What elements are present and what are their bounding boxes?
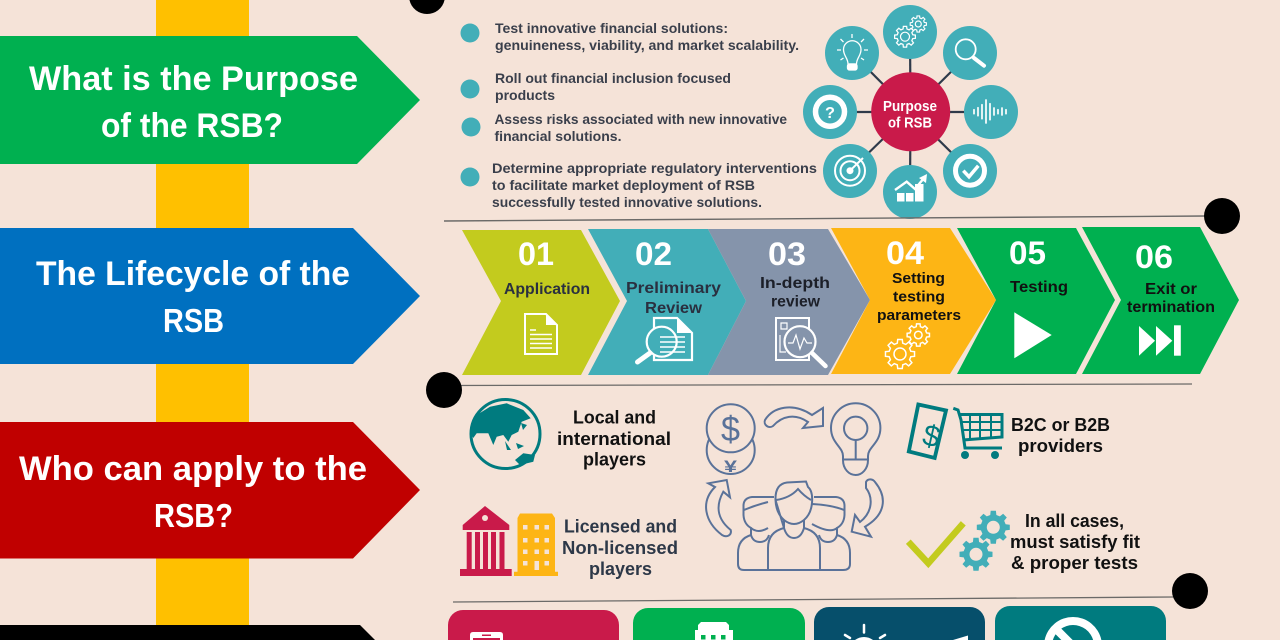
step 03 in-depth review: In-depth [760, 275, 830, 292]
heading arrow: lifecycle: The Lifecycle of the [36, 255, 350, 293]
people group [738, 482, 850, 570]
icon: phone with dollar: $ [919, 419, 943, 455]
step 06 exit or termination: termination [1127, 299, 1215, 316]
icon: check mark [908, 523, 963, 563]
step 02 preliminary review [588, 229, 746, 375]
node: divider with black dot [453, 573, 1208, 609]
heading arrow: purpose: of the RSB? [101, 107, 283, 145]
step 01 application: Application [504, 281, 590, 298]
step 04 setting testing parameters: testing [893, 288, 945, 306]
icon: magnifier [956, 39, 984, 66]
icon: phone with dollar [909, 404, 946, 458]
icon: innovation cycle [706, 403, 883, 570]
purpose bullet list: products [495, 87, 555, 103]
text: licensed and non-licensed players: Licensed and [564, 516, 677, 536]
node: divider with black dot [426, 372, 1192, 408]
heading arrow: black cut-off [0, 625, 375, 640]
step 06 exit or termination [1082, 227, 1239, 374]
text: local and international players: players [583, 450, 646, 470]
icon: question ring: ? [825, 105, 835, 122]
heading arrow: who can apply: Who can apply to the [19, 450, 367, 488]
applicants section [460, 400, 1140, 579]
yuan coin: ¥ [724, 457, 738, 476]
purpose bullet list: successfully tested innovative solutions. [492, 194, 762, 210]
bottom card: teal with prohibition icon [995, 606, 1166, 640]
icon: sound wave [974, 100, 1006, 123]
text: fit and proper tests [1010, 511, 1140, 573]
step 04 setting testing parameters: 04 [886, 235, 924, 271]
dollar coin: $ [721, 410, 740, 449]
text: licensed and non-licensed players: players [589, 559, 652, 579]
icon: shopping cart [953, 408, 1002, 459]
bulb [831, 403, 880, 475]
text: fit and proper tests: must satisfy fit [1010, 532, 1140, 552]
icon: gears [895, 16, 926, 47]
left person [738, 497, 774, 570]
step 04 setting testing parameters: Setting [892, 270, 945, 287]
icon: teal gears [960, 511, 1010, 571]
text: local and international players [557, 408, 671, 470]
step 05 testing [957, 228, 1115, 374]
purpose bullet list: Assess risks associated with new innovative [494, 111, 787, 127]
right person [812, 497, 850, 570]
node: top black dot [409, 0, 445, 14]
icon: globe [470, 400, 540, 468]
text: B2C or B2B providers: providers [1018, 436, 1103, 456]
step 02 preliminary review: 02 [635, 236, 672, 272]
text: licensed and non-licensed players: Non-licensed [562, 538, 678, 558]
icon: check ring [956, 156, 984, 185]
icon: rising chart [895, 174, 927, 202]
yuan coin [707, 426, 755, 476]
heading arrow: who can apply: RSB? [154, 497, 233, 534]
step 03 in-depth review: review [771, 294, 821, 310]
text: local and international players: Local and [573, 408, 656, 428]
text: licensed and non-licensed players [562, 516, 678, 579]
icon: light bulb [837, 34, 868, 70]
text: B2C or B2B providers: B2C or B2B [1011, 415, 1110, 435]
lifecycle chevrons [462, 227, 1239, 375]
step 05 testing: Testing [1010, 279, 1068, 296]
icon: bank [460, 506, 512, 576]
step 03 in-depth review [708, 229, 870, 375]
purpose bullet list: to facilitate market deployment of RSB [492, 177, 755, 193]
hub diagram: purpose of RSB [803, 5, 1018, 219]
heading arrow: lifecycle [0, 228, 420, 364]
dollar coin [707, 404, 755, 452]
purpose bullet list: Determine appropriate regulatory interventions [492, 160, 817, 176]
bottom card: green [633, 608, 805, 640]
hub diagram: purpose of RSB: Purpose [883, 99, 937, 115]
heading arrow: who can apply [0, 422, 420, 558]
heading arrow: purpose [0, 36, 420, 164]
purpose bullet list [460, 20, 817, 210]
bottom card: navy [814, 607, 985, 640]
text: B2C or B2B providers [1011, 415, 1110, 456]
step 02 preliminary review: Review [645, 300, 703, 317]
heading arrow: purpose: What is the Purpose [29, 60, 358, 98]
text: fit and proper tests: In all cases, [1025, 511, 1124, 531]
left curved arrow [706, 480, 731, 536]
right curved arrow [852, 479, 883, 537]
purpose bullet list: Test innovative financial solutions: [495, 20, 728, 36]
purpose bullet list: Roll out financial inclusion focused [495, 70, 731, 86]
step 03 in-depth review: 03 [768, 236, 806, 272]
yellow vertical signpost [156, 0, 249, 640]
bottom card: crimson [448, 610, 619, 640]
icon: target [835, 156, 865, 186]
step 04 setting testing parameters: parameters [877, 307, 961, 324]
center person [768, 482, 820, 570]
step 01 application [462, 230, 620, 375]
top curved arrow [765, 407, 823, 428]
step 04 setting testing parameters [831, 228, 996, 374]
text: fit and proper tests: & proper tests [1011, 553, 1138, 573]
step 05 testing: 05 [1009, 235, 1046, 271]
text: local and international players: international [557, 429, 671, 449]
icon: question ring [816, 97, 844, 126]
purpose bullet list: financial solutions. [494, 128, 622, 144]
heading arrow: lifecycle: RSB [163, 302, 224, 339]
hub diagram: purpose of RSB: of RSB [888, 116, 932, 132]
purpose bullet list: genuineness, viability, and market scalability. [495, 37, 799, 53]
node: divider with black dot [444, 198, 1240, 234]
step 02 preliminary review: Preliminary [626, 280, 721, 297]
step 06 exit or termination: Exit or [1145, 281, 1197, 298]
step 01 application: 01 [518, 236, 554, 272]
step 06 exit or termination: 06 [1135, 239, 1173, 275]
icon: office building [514, 514, 558, 576]
